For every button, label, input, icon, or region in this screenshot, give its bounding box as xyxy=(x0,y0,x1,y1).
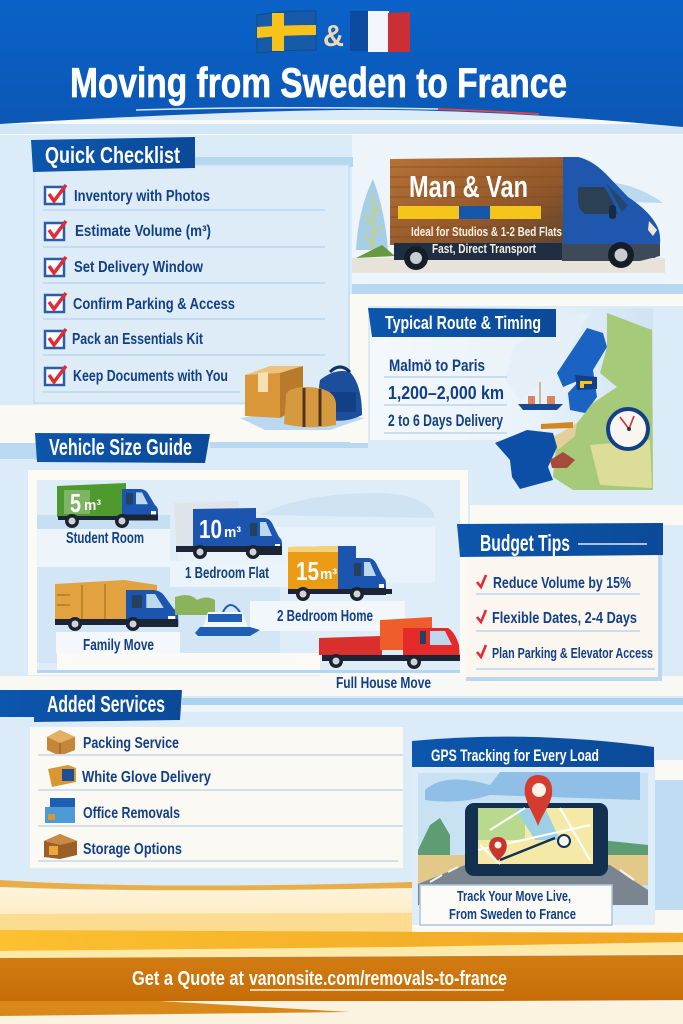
heading: typical route: Typical Route & Timing xyxy=(385,313,541,333)
title underline xyxy=(136,108,539,114)
service: packing xyxy=(38,730,403,756)
van cab xyxy=(562,157,660,258)
truck: 10 m3: m³ xyxy=(224,524,241,541)
van caption 2: Fast, Direct Transport xyxy=(432,241,537,256)
tip: plan parking xyxy=(476,645,655,669)
heading: quick checklist xyxy=(31,137,195,172)
scandinavia xyxy=(557,328,607,413)
truck: 10 m3: 10 xyxy=(199,514,222,544)
checklist item: inventory xyxy=(43,185,325,210)
heading: added services: Added Services xyxy=(47,691,165,717)
man and van text: Man & Van xyxy=(409,169,528,204)
label: 2 bedroom home xyxy=(250,601,405,631)
label: student room: Student Room xyxy=(66,530,144,547)
van lower trim xyxy=(562,244,660,261)
panel: added services xyxy=(0,690,403,868)
heading: gps tracking: GPS Tracking for Every Load xyxy=(431,746,599,765)
service: office removals xyxy=(38,798,403,826)
label: family move: Family Move xyxy=(83,637,154,654)
heading: vehicle size guide xyxy=(35,433,210,463)
van window xyxy=(578,187,618,214)
route text: Malmö to Paris xyxy=(389,357,485,375)
switzerland xyxy=(550,452,575,468)
ship xyxy=(518,382,563,410)
truck: 15 m3: m³ xyxy=(320,566,337,583)
truck: full house move xyxy=(319,617,460,669)
panel: vehicle guide xyxy=(28,470,468,693)
panel: budget tips xyxy=(457,523,663,681)
tip: flexible dates: Flexible Dates, 2-4 Days xyxy=(492,610,637,627)
wheels xyxy=(404,242,634,270)
panel: quick checklist xyxy=(31,137,349,403)
service: white glove: White Glove Delivery xyxy=(82,769,211,786)
orange footer waves xyxy=(0,880,683,958)
map xyxy=(495,312,653,490)
illustration: gps scene xyxy=(418,772,648,905)
icon: clock xyxy=(608,409,648,449)
header band xyxy=(0,0,683,127)
route marker xyxy=(541,422,573,429)
label: 2 bedroom home: 2 Bedroom Home xyxy=(277,608,373,625)
truck: 5 m3: m³ xyxy=(84,497,101,514)
van box xyxy=(390,157,563,245)
tip: reduce volume xyxy=(476,575,640,594)
gps caption: From Sweden to France xyxy=(449,907,576,923)
icon: French flag xyxy=(350,11,410,52)
pin: destination xyxy=(525,775,552,826)
flag marker xyxy=(575,375,597,390)
service: packing: Packing Service xyxy=(83,735,179,752)
tip: flexible dates xyxy=(476,610,640,631)
route text xyxy=(384,357,507,433)
checklist item: essentials kit xyxy=(43,329,325,355)
call to action bar: Get a Quote at xyxy=(132,968,244,990)
service: storage xyxy=(38,834,398,861)
service: white glove xyxy=(38,765,403,790)
truck: 5 m3: 5 xyxy=(70,488,81,518)
heading: added services xyxy=(0,690,182,722)
checklist item: parking: Confirm Parking & Access xyxy=(73,296,235,313)
land xyxy=(553,313,653,490)
label: full house move: Full House Move xyxy=(336,675,431,692)
van underside panel xyxy=(394,243,562,260)
heading: typical route xyxy=(368,308,556,337)
ampersand: & xyxy=(323,18,344,53)
swedish stripe xyxy=(398,206,541,219)
truck: family move xyxy=(55,580,178,631)
heading: budget tips: Budget Tips xyxy=(480,530,570,556)
illustration: ferry xyxy=(175,595,260,636)
title: Moving from Sweden to France xyxy=(70,59,567,106)
france xyxy=(495,430,557,489)
heading: vehicle size guide: Vehicle Size Guide xyxy=(49,434,192,460)
truck: 5 m3 xyxy=(57,483,158,528)
checklist item: delivery window: Set Delivery Window xyxy=(74,259,204,276)
checklist item: essentials kit: Pack an Essentials Kit xyxy=(72,331,203,348)
label: 1 bedroom flat: 1 Bedroom Flat xyxy=(185,565,269,582)
label: family move xyxy=(56,632,180,654)
heading: quick checklist: Quick Checklist xyxy=(45,142,180,168)
illustration: man and van xyxy=(352,157,665,273)
pin: origin xyxy=(489,837,507,861)
truck: 15 m3: 15 xyxy=(296,556,319,586)
background bands xyxy=(0,120,683,712)
service: office removals: Office Removals xyxy=(83,805,180,822)
checklist item: volume xyxy=(43,221,325,247)
heading: budget tips xyxy=(457,523,663,557)
road xyxy=(352,258,665,273)
checklist item: documents: Keep Documents with You xyxy=(73,368,228,385)
tree xyxy=(356,179,395,258)
tip: reduce volume: Reduce Volume by 15% xyxy=(493,575,631,592)
icon: Swedish flag xyxy=(257,11,316,53)
truck: 15 m3 xyxy=(288,546,392,601)
service: storage: Storage Options xyxy=(83,841,182,858)
checklist item: volume: Estimate Volume (m³) xyxy=(75,223,211,240)
gps caption xyxy=(420,885,612,925)
checklist item: inventory: Inventory with Photos xyxy=(74,188,210,205)
checklist item: delivery window xyxy=(43,257,325,283)
tablet xyxy=(465,803,608,876)
panel: gps tracking xyxy=(412,737,683,932)
label: 1 bedroom flat xyxy=(170,561,290,587)
route text: 1,200–2,000 km xyxy=(388,383,504,403)
checklist item: parking xyxy=(43,293,325,319)
wind swoosh xyxy=(610,182,663,203)
truck: 10 m3 xyxy=(174,501,282,559)
panel: route and timing xyxy=(350,294,683,490)
illustration: boxes and bags xyxy=(240,366,365,430)
call to action bar xyxy=(0,955,683,1024)
checklist item: documents xyxy=(43,366,240,392)
route text: 2 to 6 Days Delivery xyxy=(388,412,504,430)
gps caption: Track Your Move Live, xyxy=(457,889,571,905)
van caption 1: Ideal for Studios & 1-2 Bed Flats xyxy=(411,224,562,239)
heading: gps tracking xyxy=(412,737,654,767)
call to action bar: vanonsite.com/removals-to-france xyxy=(249,968,507,990)
